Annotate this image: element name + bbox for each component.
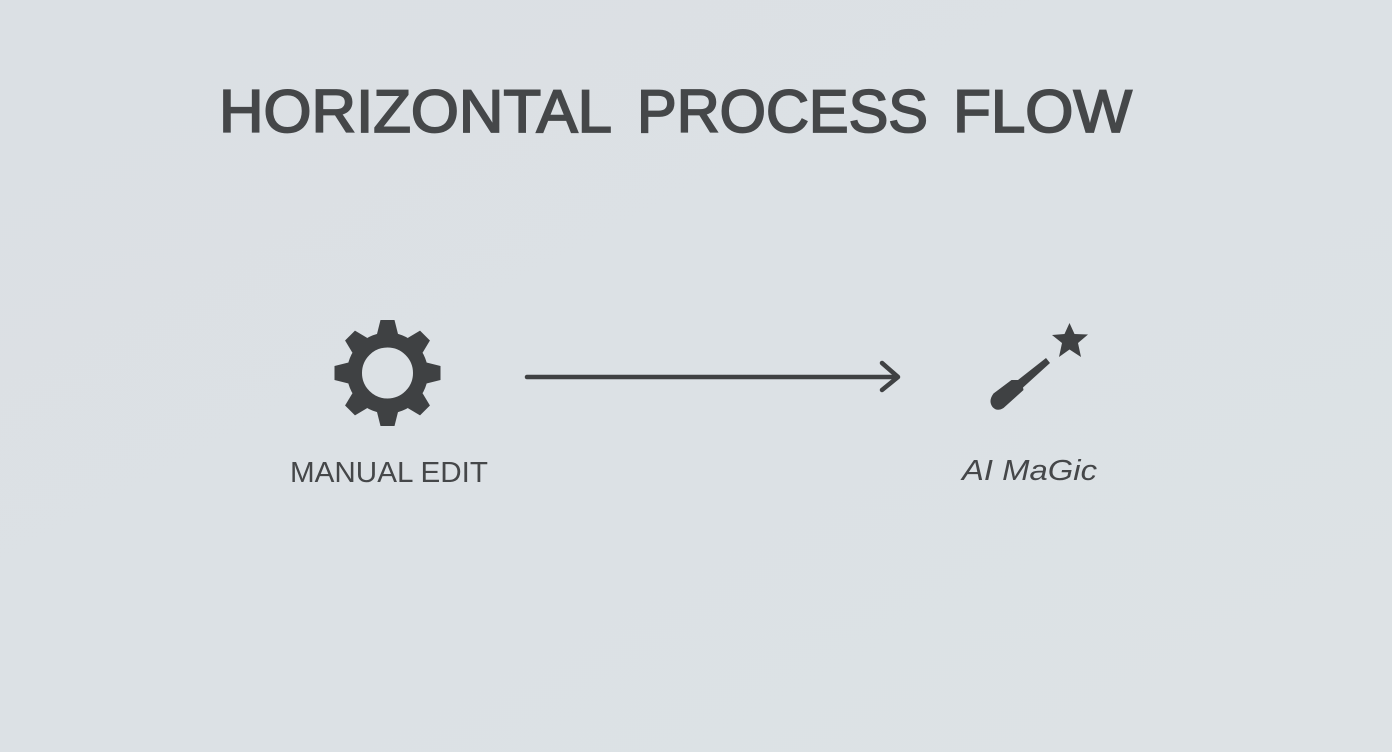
step: ai magic <box>960 323 1098 487</box>
step: manual edit <box>290 320 488 489</box>
icon: gear <box>334 320 440 426</box>
title <box>219 78 1132 145</box>
label: manual edit: MANUAL EDIT <box>290 457 488 489</box>
label: ai magic: AI MaGic <box>960 455 1098 487</box>
title: PROCESS <box>637 78 928 145</box>
title: HORIZONTAL <box>219 78 612 145</box>
title: FLOW <box>953 78 1132 145</box>
arrow <box>527 363 898 390</box>
icon: magic wand with star <box>990 323 1088 410</box>
